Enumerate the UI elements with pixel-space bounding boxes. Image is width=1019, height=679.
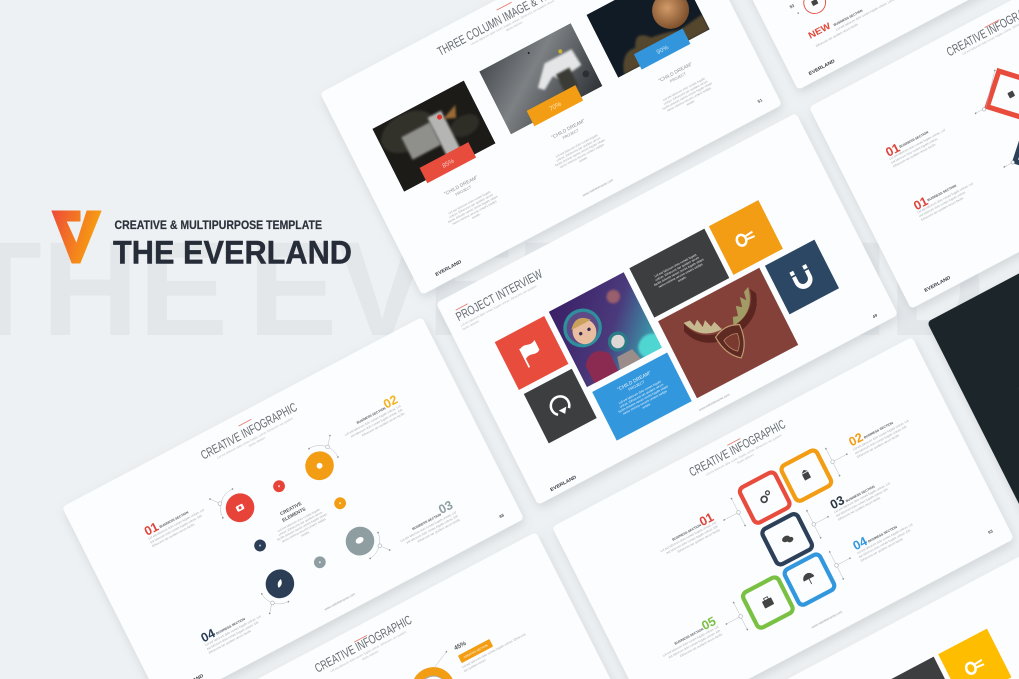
dark text tile: Lid est laborum dolo rumes fugats (654, 252, 698, 278)
dark tile (859, 657, 959, 679)
section 01: Lid est laborum dolo rumes fugats untras. Lid (148, 508, 205, 541)
section 03: est laborum dolo rumes fugats untras. Eth (406, 514, 459, 545)
red diamond (976, 59, 1019, 130)
section 04: BUSINESS SECTION (867, 525, 898, 544)
caption 3 (650, 57, 717, 118)
section 04: Etharums ser quidem rerum facilis (860, 537, 904, 563)
moose tile (658, 268, 798, 398)
section 01: Lid est laborum dolo rumes fugats untras. Lid (889, 128, 946, 161)
footer: EVERLAND (808, 58, 837, 77)
slide: creative infographic donut: Lid est laborum dolo rumes fugats untras. Etharums ser quidem (330, 630, 408, 673)
slide: three column image: Lid est laborum dolo rumes fugats untras. Etharums ser quidem rerum (470, 0, 555, 46)
section 02: est laborum dolo rumes fugats untras. Eth (350, 408, 403, 438)
blue text tile: Lid est laborum dolo rumes fugats (618, 379, 662, 405)
center text: Lid est laborum dolo rumes fugats (277, 507, 321, 533)
circle 03 gray (341, 522, 379, 561)
footer: www.websitename.com (811, 610, 843, 629)
footer (548, 312, 880, 493)
section 01 (142, 497, 209, 548)
footer: 51 (757, 97, 764, 104)
section 01 second: Etharums ser quidem rerum facilis (920, 196, 964, 222)
section 05: BUSINESS SECTION (674, 627, 705, 646)
label 70% (527, 85, 583, 126)
slide: project interview: facilis dolores (462, 319, 480, 331)
section 01: 01 (142, 520, 161, 539)
footer: www.websitename.com (698, 392, 731, 412)
blue text tile: untras. Etharums ser quidem rerum (619, 382, 665, 409)
blue text tile: "CHILD DREAM" (616, 370, 652, 393)
new label: Etharums ser quidem rerum facilis (815, 22, 859, 48)
yellow key tile (938, 629, 1011, 679)
section 04: est laborum dolo rumes fugats untras. Eth (206, 620, 259, 651)
new label: NEW (807, 21, 832, 41)
blue text tile: PROJECT (628, 380, 646, 392)
label 90% (634, 28, 690, 70)
slide: creative infographic diamonds (809, 0, 1019, 309)
slide: creative infographic circles: Lid est laborum dolo rumes fugats untras. Etharums ser quidem (216, 416, 294, 460)
donut chart (405, 652, 467, 679)
section 01 second (911, 171, 978, 222)
connectors (961, 69, 1019, 169)
slide: new business section (696, 0, 1019, 90)
footer: EVERLAND (923, 275, 952, 294)
section 01: est laborum dolo rumes fugats untras. (890, 136, 939, 165)
connectors (676, 440, 897, 638)
caption 3: amets. (686, 99, 696, 107)
footer: EVERLAND (549, 474, 578, 493)
caption 1 (435, 170, 502, 231)
caption 2: "CHILD DREAM" (551, 118, 586, 141)
dark text tile: facilis dolores nemis omnis fugats vitaes (653, 257, 705, 287)
section 05: 05 (699, 614, 718, 633)
center text: nemo minima rerums unsers sadips (281, 517, 327, 544)
section 04: 04 (199, 626, 218, 645)
slide: three column image (320, 0, 782, 295)
section 03: 03 (436, 498, 455, 517)
section 02: BUSINESS SECTION (863, 421, 894, 440)
section 01: Etharums ser quidem rerum facilis (892, 142, 937, 168)
center text: facilis dolores nemis omnis fugats vitaes (276, 512, 328, 542)
blue text tile: nemo minima rerums unsers sadips (622, 389, 668, 416)
label 85%: 85% (441, 158, 456, 170)
section 05 (657, 614, 723, 665)
section 03: BUSINESS SECTION (845, 484, 876, 503)
blue text tile: amets. (642, 402, 652, 410)
photo 2 (479, 23, 602, 134)
caption 1: PROJECT (455, 185, 473, 197)
caption 3: facilis dolores nemis omnis fugats vitaes (662, 81, 713, 111)
section 03: Etharums ser quidem rerum facilis (417, 518, 461, 543)
section 05: Lid est laborum dolo rumes fugats untras. Lid (662, 625, 719, 658)
orange key tile (709, 200, 783, 275)
section 03: 03 (828, 493, 847, 512)
title: CREATIVE INFOGRAPHIC (687, 417, 788, 479)
caption 2: PROJECT (562, 128, 580, 140)
section 02 (847, 407, 913, 459)
caption 3: nemo minima rerums unsers sadips (666, 86, 712, 113)
footer (810, 528, 995, 629)
section 02: Lid est laborum dolo rumes fugats untras. Lid (344, 404, 402, 437)
section 04: Etharums ser quidem rerum facilis (208, 629, 252, 655)
red gears square (738, 471, 791, 524)
section 03 (828, 470, 895, 522)
navy diamond (1015, 126, 1019, 172)
center text: untras. Etharums ser quidem rerum (278, 510, 323, 537)
45% label: CREATIVE SECTION (463, 643, 488, 659)
green briefcase square (741, 576, 794, 629)
section 04: est laborum dolo rumes fugats untras. Eth (858, 528, 911, 559)
footer: 88 (498, 512, 505, 519)
center text: CREATIVE (279, 501, 303, 517)
caption 2: facilis dolores nemis omnis fugats vitaes (554, 138, 606, 167)
photo 3 (586, 0, 710, 78)
slide: creative infographic squares: facilis dolores (737, 452, 755, 465)
slide: creative infographic donut: facilis dolores (361, 649, 380, 661)
caption 1: facilis dolores nemis omnis fugats vitaes (447, 194, 499, 224)
circle 01 red (221, 488, 259, 527)
caption 2: amets. (578, 155, 589, 163)
section 01 second: BUSINESS SECTION (927, 183, 958, 202)
small dots (233, 456, 367, 592)
footer (433, 97, 765, 278)
slide: creative infographic circles: facilis dolores (248, 435, 267, 448)
section 01 second: Lid est laborum dolo rumes fugats untras. Lid (917, 181, 974, 214)
red flag tile (495, 316, 568, 390)
footer: www.websitename.com (582, 178, 614, 198)
slide: dark (927, 132, 1019, 674)
section 01: Lid est laborum dolo rumes fugats untras. Lid (660, 520, 717, 553)
section 01: BUSINESS SECTION (672, 523, 703, 542)
center text (267, 492, 331, 549)
caption 1: untras. Etharums ser quidem rerum (448, 192, 494, 219)
footer: www.websitename.com (324, 592, 356, 612)
caption 3: PROJECT (669, 71, 687, 84)
slide: key tile (668, 552, 1019, 679)
45% label: 45% (453, 640, 468, 652)
section 01: BUSINESS SECTION (899, 130, 930, 149)
circle 02 orange (300, 446, 339, 485)
section 01 (654, 510, 721, 561)
section 04: Lid est laborum dolo rumes fugats untras. Lid (204, 614, 262, 647)
blue umbrella square (783, 553, 836, 607)
dark text tile (629, 229, 729, 318)
caption 2: untras. Etharums ser quidem rerum (556, 136, 601, 163)
slide: creative infographic squares: Lid est laborum dolo rumes fugats untras. Etharums ser quidem (705, 433, 783, 477)
main title: THE EVERLAND (113, 234, 352, 270)
slide: creative infographic donut (176, 532, 638, 679)
section 02 (338, 392, 405, 444)
new label: BUSINESS SECTION (833, 8, 864, 27)
section 04 (851, 511, 917, 563)
section 03: Lid est laborum dolo rumes fugats untras. Lid (833, 481, 891, 514)
subtitle: CREATIVE & MULTIPURPOSE TEMPLATE (114, 218, 322, 232)
blue text tile: facilis dolores nemis omnis fugats vitaes (618, 384, 669, 414)
section 01: 01 (697, 510, 716, 529)
ghost background title: EVERLAND (248, 215, 985, 364)
dark tile (524, 369, 597, 443)
footer: 93 (987, 528, 994, 535)
title: CREATIVE INFOGRAPHIC (199, 400, 299, 462)
ring icon (800, 0, 829, 17)
slide: new business section: 53 (789, 3, 796, 10)
section 03: Etharums ser quidem rerum facilis (837, 496, 881, 522)
section 05: Etharums ser quidem rerum facilis (679, 632, 723, 658)
dark text tile: amets. (677, 275, 687, 283)
dark text tile: nemo minima rerums unsers sadips (658, 262, 704, 289)
arcs and connectors (209, 434, 391, 615)
slide: creative infographic squares (552, 337, 1014, 679)
logo (52, 211, 101, 263)
section 01: 01 (883, 141, 902, 160)
section 01 second: 01 (911, 194, 930, 213)
center text: amets. (300, 530, 311, 538)
section 02: 02 (381, 392, 400, 411)
section 01: est laborum dolo rumes fugats untras. Eth (666, 524, 719, 555)
section 05: est laborum dolo rumes fugats untras. Eth (668, 628, 721, 659)
photo: child dream (548, 272, 662, 387)
title: PROJECT INTERVIEW (454, 267, 545, 324)
caption 1: amets. (471, 212, 481, 220)
45% label: ser quidem rerum (463, 658, 487, 673)
caption 2: nemo minima rerums unsers sadips (559, 142, 605, 169)
caption 2 (542, 114, 609, 174)
footer: EVERLAND (434, 259, 463, 278)
section 03 (393, 498, 461, 550)
45% label: Lid est laborum dolo rumes fugats untras. Etharums (461, 632, 527, 669)
section 02: Etharums ser quidem rerum facilis (361, 411, 405, 437)
circle 04 navy (261, 564, 299, 603)
label 85% (420, 142, 476, 183)
section 01: est laborum dolo rumes fugats untras. Eth (149, 514, 203, 544)
caption 3: Lid est laborum dolo rumes fugats (662, 76, 706, 102)
center text: ELEMENTS (281, 506, 307, 524)
caption 2: Lid est laborum dolo rumes fugats (555, 133, 599, 159)
section 02: Etharums ser quidem rerum facilis (856, 433, 900, 459)
section 03: BUSINESS SECTION (411, 512, 442, 531)
section 01: Etharums ser quidem rerum facilis (151, 522, 195, 548)
section 02: est laborum dolo rumes fugats untras. Eth (854, 425, 908, 455)
section 04: BUSINESS SECTION (215, 617, 246, 636)
navy chat square (761, 512, 814, 566)
slide: three column image: facilis dolores (505, 20, 524, 32)
section 02: Lid est laborum dolo rumes fugats untras. Lid (852, 419, 910, 452)
caption 3: untras. Etharums ser quidem rerum (663, 79, 709, 106)
section 03: est laborum dolo rumes fugats untras. Eth (835, 487, 889, 518)
section 01: Etharums ser quidem rerum facilis (677, 528, 721, 554)
label 70%: 70% (548, 101, 563, 113)
caption 3: "CHILD DREAM" (658, 61, 694, 84)
caption 1: "CHILD DREAM" (443, 175, 479, 197)
section 03: Lid est laborum dolo rumes fugats untras. Lid (400, 510, 457, 543)
label 90%: 90% (656, 44, 670, 56)
dark text tile: untras. Etharums ser quidem rerum (655, 255, 700, 282)
navy magnet tile (765, 240, 839, 314)
orange gift square (780, 449, 833, 503)
45% label (445, 613, 529, 677)
section 04: 04 (851, 534, 869, 553)
section 02: BUSINESS SECTION (356, 406, 387, 425)
caption 1: Lid est laborum dolo rumes fugats (448, 190, 492, 215)
new label (807, 0, 910, 49)
section 04 (199, 603, 265, 655)
section 01: BUSINESS SECTION (159, 510, 190, 529)
section 01 second: est laborum dolo rumes fugats untras. (918, 190, 967, 218)
slide: project interview: Lid est laborum dolo rumes fugats untras. Etharums ser quidem (460, 284, 538, 328)
footer: 49 (872, 312, 879, 319)
footer (176, 512, 507, 679)
slide: project interview (436, 113, 898, 505)
section 01 (883, 118, 950, 168)
section 02: 02 (847, 430, 865, 449)
title: CREATIVE INFOGRAPHIC (313, 613, 414, 676)
blue text tile (592, 352, 692, 441)
slide: creative infographic circles (62, 317, 524, 679)
photo 1 (372, 81, 496, 192)
section 04: Lid est laborum dolo rumes fugats untras. Lid (856, 522, 914, 555)
caption 1: nemo minima rerums unsers sadips (452, 199, 498, 226)
